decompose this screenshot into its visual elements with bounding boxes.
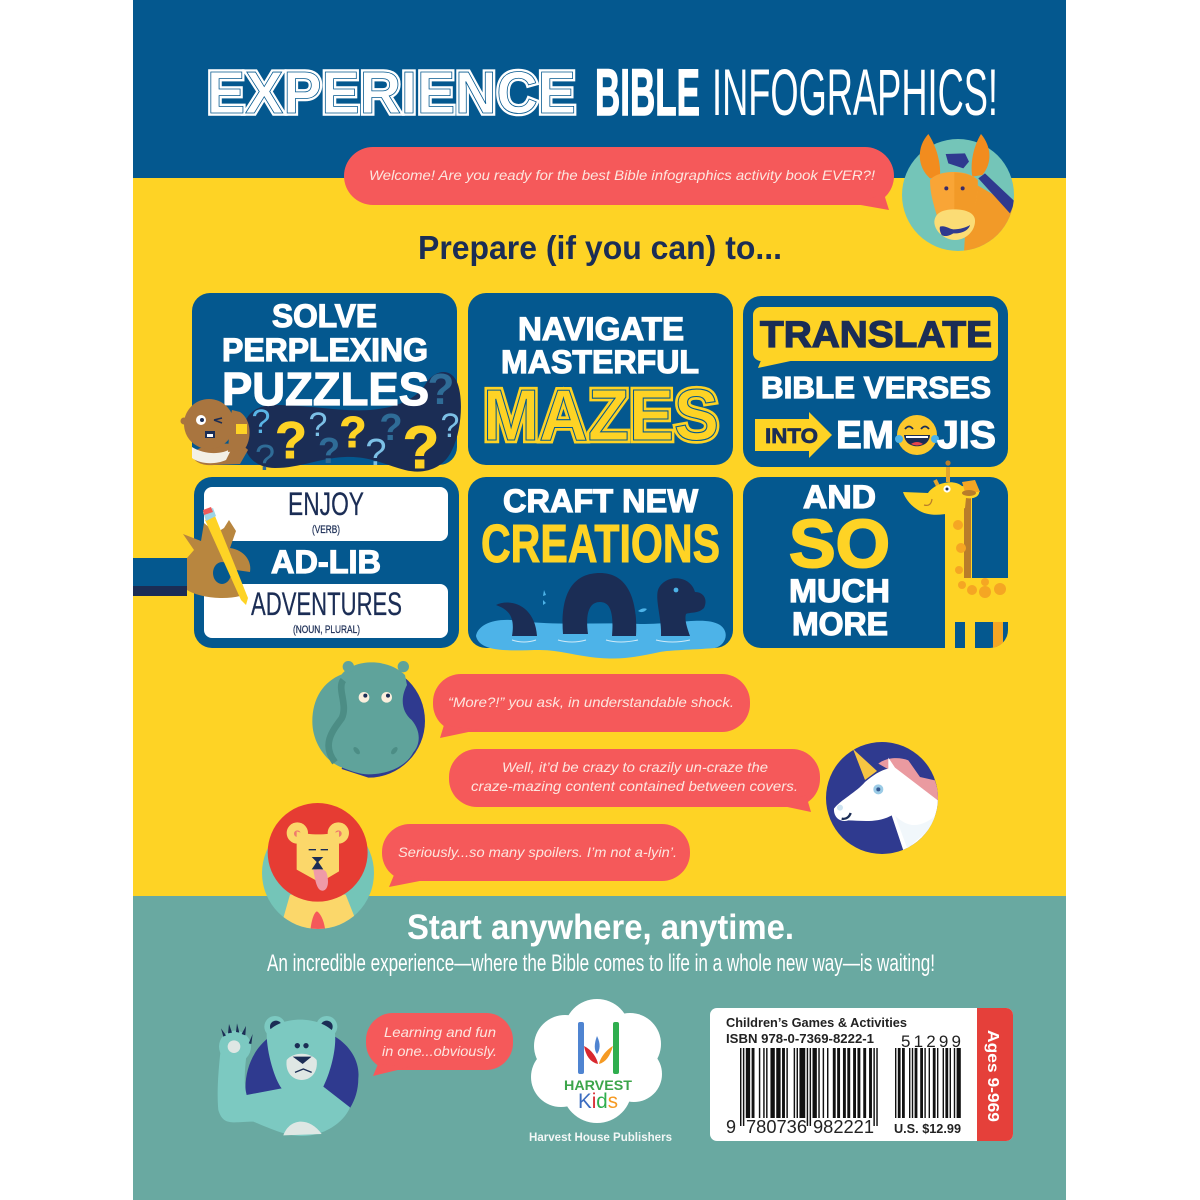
add-on bars	[895, 1048, 961, 1118]
giraffe head	[903, 460, 980, 515]
panel: creations	[468, 477, 733, 659]
panel: translate	[743, 296, 1008, 467]
speech bubble: well: craze-mazing content contained between covers.	[471, 778, 798, 794]
blob with question marks: ?	[403, 414, 439, 481]
icon: giraffe	[945, 495, 1010, 652]
subheading: An incredible experience—where the Bible comes to life in a whole new way—is waiting!	[267, 950, 935, 977]
water	[476, 620, 726, 659]
blob with question marks	[243, 365, 461, 481]
maze lettering: MAZES	[483, 376, 719, 456]
barcode label: ISBN 978-0-7369-8222-1	[726, 1032, 874, 1046]
speech bubble: welcome: Welcome! Are you ready for the best Bible infographics activity book EVER?!	[369, 167, 875, 183]
icon: bear	[218, 1016, 359, 1136]
panel: translate: EM	[836, 414, 894, 457]
blob with question marks: ?	[252, 403, 270, 441]
panel: so much more	[743, 460, 1010, 652]
panel: translate: BIBLE VERSES	[761, 370, 991, 405]
panel: puzzles: PERPLEXING	[222, 332, 428, 368]
arrow: into: INTO	[765, 425, 818, 448]
speech bubble: more: “More?!” you ask, in understandable shock.	[448, 694, 734, 710]
blob with question marks: ?	[441, 407, 459, 445]
blob with question marks: ?	[309, 406, 327, 444]
panel: translate: JIS	[937, 414, 996, 457]
panel: puzzles	[180, 293, 461, 481]
panel: mazes: MASTERFUL	[501, 344, 699, 380]
icon: laughing emoji	[895, 415, 939, 455]
speech bubble: learning	[366, 1013, 513, 1076]
speech bubble: learning: Learning and fun	[384, 1024, 496, 1040]
panel: puzzles: SOLVE	[272, 298, 377, 334]
panel: ad-lib	[133, 477, 459, 648]
icon: donkey	[902, 134, 1014, 251]
panel: creations: CRAFT NEW	[503, 483, 699, 519]
logo: harvest kids	[531, 999, 662, 1123]
yellow bubble: TRANSLATE	[760, 314, 992, 355]
icon: lion	[262, 803, 374, 935]
title: BIBLE	[595, 55, 700, 129]
speech bubble: more	[433, 674, 750, 738]
logo: harvest kids: Kids	[578, 1090, 618, 1113]
panel: ad-lib: AD-LIB	[271, 544, 381, 580]
panel: so much more: MORE	[792, 606, 888, 642]
speech bubble: learning: in one...obviously.	[382, 1043, 497, 1059]
speech bubble: well: Well, it’d be crazy to crazily un-craze the	[502, 759, 768, 775]
panel: so much more: AND	[803, 479, 876, 515]
panel: puzzles: PUZZLES	[222, 363, 429, 415]
panel: mazes	[468, 293, 733, 465]
panel: so much more: MUCH	[789, 573, 890, 609]
heading: prepare: Prepare (if you can) to...	[418, 229, 782, 266]
title: EXPERIENCE	[207, 60, 576, 126]
panel: mazes: NAVIGATE	[518, 311, 684, 347]
speech bubble: welcome	[344, 147, 894, 210]
title: EXPERIENCE	[207, 60, 576, 126]
logo: harvest kids: HARVEST	[564, 1077, 632, 1093]
barcode label: Children’s Games & Activities	[726, 1016, 907, 1030]
panel: ad-lib: (NOUN, PLURAL)	[293, 624, 360, 636]
speech bubble: seriously	[382, 824, 690, 887]
blob with question marks: ?	[255, 437, 275, 478]
barcode label: 780736	[746, 1117, 807, 1137]
panel: ad-lib: (VERB)	[312, 524, 340, 536]
speech bubble: well	[449, 749, 820, 812]
creations lettering: CREATIONS	[481, 514, 720, 574]
arrow: into	[755, 412, 832, 458]
barcode label: 982221	[813, 1117, 874, 1137]
blob with question marks: ?	[379, 407, 403, 449]
title	[207, 55, 998, 129]
icon: hand and pencil	[133, 507, 250, 605]
heading: start anywhere: Start anywhere, anytime.	[407, 908, 794, 947]
blob with question marks: ?	[275, 412, 307, 470]
barcode label: 9	[726, 1117, 736, 1137]
icon: hippo	[312, 661, 425, 778]
barcode bars	[740, 1048, 878, 1126]
icon: sea monster	[496, 573, 706, 642]
barcode label: 51299	[901, 1032, 961, 1051]
barcode label: U.S. $12.99	[894, 1122, 961, 1136]
speech bubble: seriously: Seriously...so many spoilers. I’m not a-lyin’.	[398, 844, 677, 860]
barcode label: Ages 9-969	[984, 1030, 1001, 1122]
blob with question marks: ?	[428, 365, 454, 414]
blob with question marks: ?	[318, 430, 340, 471]
maze lettering: MAZES	[483, 376, 719, 456]
blob with question marks: ?	[365, 432, 387, 474]
panel: ad-lib: ENJOY	[288, 486, 364, 522]
page background bands	[133, 0, 1066, 1200]
barcode label	[710, 1008, 1013, 1141]
icon: baby	[180, 399, 250, 465]
panel: so much more: SO	[789, 506, 890, 582]
panel: ad-lib: ADVENTURES	[251, 586, 402, 622]
icon: unicorn	[826, 742, 942, 854]
yellow bubble	[753, 307, 998, 368]
publisher name: Harvest House Publishers	[529, 1130, 672, 1144]
blob with question marks: ?	[340, 408, 366, 457]
